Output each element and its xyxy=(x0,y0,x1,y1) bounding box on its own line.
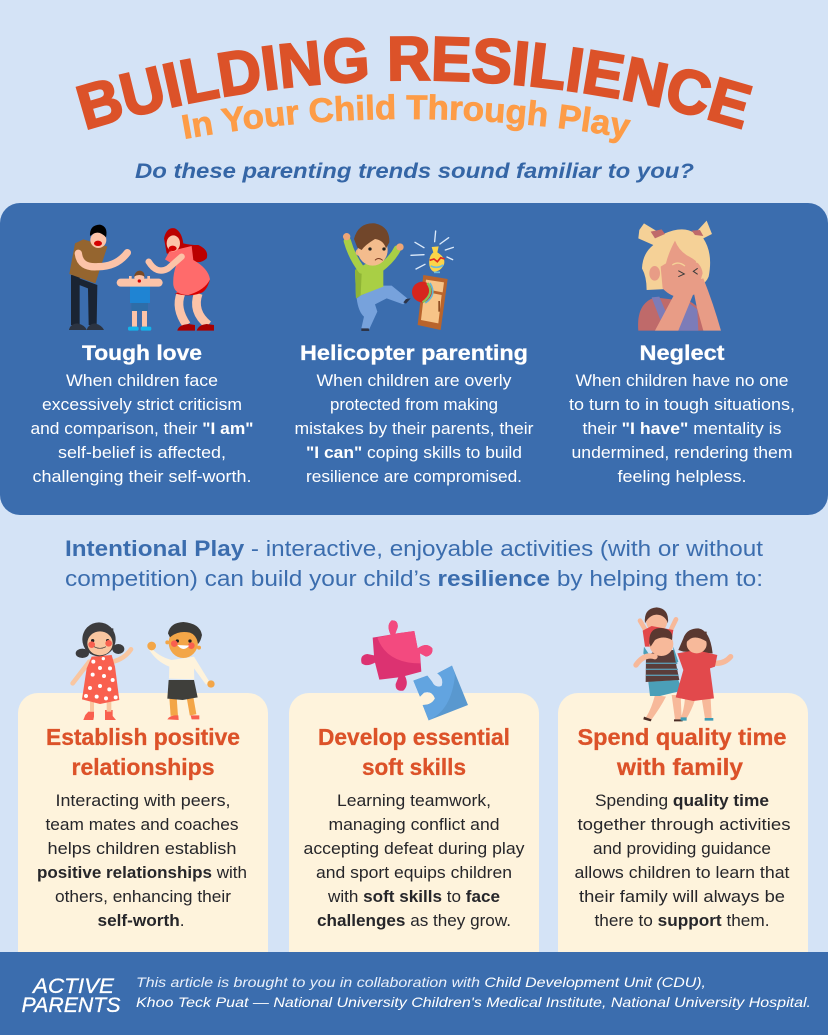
card: spend quality time with family: Spend quality time xyxy=(578,724,786,750)
card: spend quality time with family: there to support them. xyxy=(594,912,770,930)
card: spend quality time with family: Spending quality time xyxy=(595,792,769,810)
footer xyxy=(0,952,828,1035)
text block: helicopter parenting xyxy=(294,341,534,486)
intro text: intentional play: Intentional Play - interactive, enjoyable activities (with or without xyxy=(65,536,764,561)
text block: helicopter parenting: "I can" coping skills to build xyxy=(306,444,522,462)
text block: neglect: When children have no one xyxy=(576,372,788,390)
text block: tough love: excessively strict criticism xyxy=(42,396,242,414)
text block: neglect xyxy=(569,341,795,486)
text block: tough love: and comparison, their "I am" xyxy=(30,420,254,438)
card: develop essential soft skills: challenges as they grow. xyxy=(317,912,511,930)
card: establish positive relationships: others, enhancing their xyxy=(55,888,232,906)
text block: neglect: Neglect xyxy=(640,341,724,365)
card: establish positive relationships: relationships xyxy=(72,754,214,780)
text block: neglect: their "I have" mentality is xyxy=(582,420,782,438)
card: establish positive relationships: Establish positive xyxy=(46,724,240,750)
text block: tough love: challenging their self-worth. xyxy=(32,468,252,486)
card: develop essential soft skills: managing conflict and xyxy=(328,816,500,834)
title: BUILDING RESILIENCE xyxy=(76,36,753,130)
text block: neglect: feeling helpless. xyxy=(618,468,746,486)
footer credit text: Khoo Teck Puat — National University Children's Medical Institute, National University Hospital. xyxy=(136,994,811,1010)
card: develop essential soft skills: with soft skills to face xyxy=(327,888,500,906)
text block: helicopter parenting: resilience are compromised. xyxy=(306,468,522,486)
text block: neglect: to turn to in tough situations, xyxy=(569,396,795,414)
card: establish positive relationships: self-worth. xyxy=(98,912,184,930)
card: develop essential soft skills: Develop essential xyxy=(318,724,510,750)
question heading: Do these parenting trends sound familiar to you? xyxy=(135,159,694,183)
footer logo: active parents xyxy=(22,974,121,1017)
intro text: intentional play: competition) can build your child’s resilience by helping them to: xyxy=(65,566,763,591)
footer credit text: This article is brought to you in collaboration with Child Development Unit (CDU), xyxy=(136,974,706,990)
text block: tough love: self-belief is affected, xyxy=(58,444,226,462)
icon: family together xyxy=(636,607,731,721)
card: spend quality time with family: together through activities xyxy=(578,816,790,834)
card: spend quality time with family: their family will always be xyxy=(579,888,785,906)
card: develop essential soft skills: Learning teamwork, xyxy=(337,792,491,810)
text block: helicopter parenting: Helicopter parenting xyxy=(300,341,528,365)
card: spend quality time with family: and providing guidance xyxy=(593,840,771,858)
text block: neglect: undermined, rendering them xyxy=(572,444,792,462)
footer logo: active parents: ACTIVE xyxy=(31,974,115,998)
card: spend quality time with family xyxy=(558,693,808,952)
icon: girl and boy waving xyxy=(73,622,215,720)
text block: helicopter parenting: mistakes by their parents, their xyxy=(294,420,534,438)
card: spend quality time with family: with family xyxy=(616,754,743,780)
card: develop essential soft skills: soft skills xyxy=(362,754,466,780)
text block: helicopter parenting: protected from making xyxy=(330,396,498,414)
text block: tough love: When children face xyxy=(66,372,218,390)
icon: boy kicking ball at vase xyxy=(343,223,453,331)
card: establish positive relationships: Interacting with peers, xyxy=(56,792,230,810)
card: develop essential soft skills: and sport equips children xyxy=(316,864,512,882)
text block: tough love xyxy=(30,341,254,486)
footer credit text xyxy=(136,974,811,1010)
card: establish positive relationships: positive relationships with xyxy=(37,864,247,882)
card: establish positive relationships xyxy=(18,693,268,952)
text block: helicopter parenting: When children are overly xyxy=(316,372,512,390)
panel: parenting trends xyxy=(0,203,828,515)
card: spend quality time with family: allows children to learn that xyxy=(574,864,790,882)
card: develop essential soft skills xyxy=(289,693,539,952)
card: establish positive relationships: team mates and coaches xyxy=(46,816,238,834)
intro text: intentional play xyxy=(65,536,764,591)
card: establish positive relationships: helps children establish xyxy=(48,840,236,858)
footer logo: active parents: PARENTS xyxy=(22,993,121,1017)
icon: crying girl covering face xyxy=(638,221,721,331)
icon: parents shouting at child xyxy=(69,225,214,331)
text block: tough love: Tough love xyxy=(82,341,202,365)
title: In Your Child Through Play xyxy=(182,94,632,144)
card: develop essential soft skills: accepting defeat during play xyxy=(304,840,525,858)
icon: puzzle pieces xyxy=(361,620,468,720)
